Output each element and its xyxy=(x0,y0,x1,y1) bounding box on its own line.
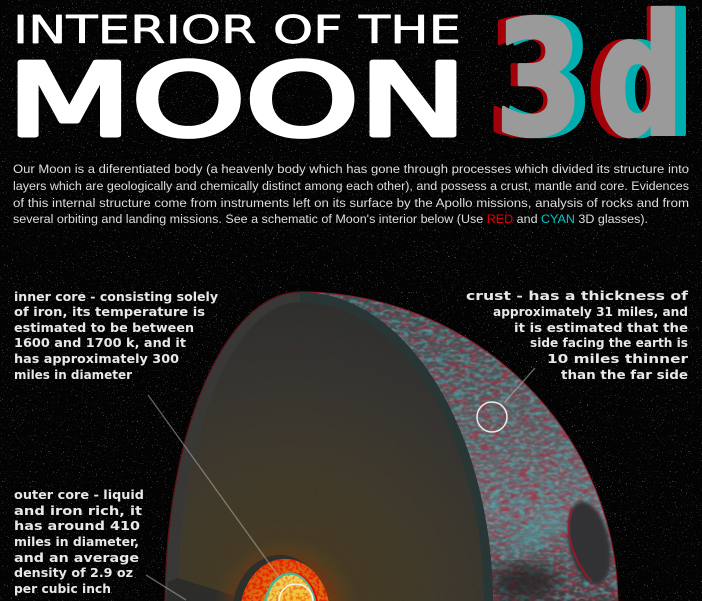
anaglyph 3d heading xyxy=(486,0,695,174)
label: inner core: 1600 and 1700 k, and it xyxy=(14,335,186,350)
label: outer core: per cubic inch xyxy=(14,581,111,596)
white ring marking the inner core xyxy=(279,584,313,601)
label: crust: side facing the earth is xyxy=(530,335,688,350)
label: crust: 10 miles thinner xyxy=(547,351,689,366)
label: inner core: estimated to be between xyxy=(14,320,194,335)
intro paragraph: Our Moon is a diferentiated body (a heavenly body which has gone through processes which divided its structure into xyxy=(13,162,689,176)
label: inner core: has approximately 300 xyxy=(14,351,179,366)
outer core xyxy=(233,555,329,601)
label: inner core: of iron, its temperature is xyxy=(14,304,205,319)
face red outline xyxy=(165,292,300,601)
label: inner core xyxy=(14,289,218,382)
label: outer core: has around 410 xyxy=(14,518,140,533)
cut face of the mantle xyxy=(160,292,500,601)
leader line: inner core xyxy=(148,395,279,577)
label: outer core: density of 2.9 oz xyxy=(14,565,133,580)
label: crust xyxy=(466,288,689,382)
label: crust: it is estimated that the xyxy=(514,320,688,335)
label: crust: crust - has a thickness of xyxy=(466,288,689,303)
crust marker ring xyxy=(477,402,507,432)
crust outer red edge xyxy=(300,292,618,601)
intro paragraph: several orbiting and landing missions. See a schematic of Moon's interior below (Use RED and CYAN 3D glasses). xyxy=(13,212,648,226)
label: outer core: and an average xyxy=(14,550,139,565)
title: moon: MOON xyxy=(7,42,467,159)
intro paragraph: layers which are geologically and chemically distinct among each other), and possess a crust, mantle and core. Evidences xyxy=(13,179,689,193)
moon cutaway diagram xyxy=(160,292,620,601)
intro paragraph xyxy=(13,162,689,226)
label: outer core: miles in diameter, xyxy=(14,534,139,549)
label: outer core: outer core - liquid xyxy=(14,487,144,502)
label: outer core: and iron rich, it xyxy=(14,503,142,518)
label: crust: than the far side xyxy=(561,367,688,382)
title: interior of the: INTERIOR OF THE xyxy=(13,8,461,53)
inner core xyxy=(264,573,318,601)
label: inner core: inner core - consisting solely xyxy=(14,289,218,304)
crust with surface texture xyxy=(300,292,620,601)
leader line: outer core xyxy=(146,575,186,600)
label: inner core: miles in diameter xyxy=(14,367,133,382)
leader line: crust xyxy=(504,368,535,403)
intro paragraph: of this internal structure come from instruments left on its surface by the Apollo missions, analysis of rocks and from xyxy=(13,196,689,210)
label: crust: approximately 31 miles, and xyxy=(493,304,688,319)
label: outer core xyxy=(14,487,144,596)
